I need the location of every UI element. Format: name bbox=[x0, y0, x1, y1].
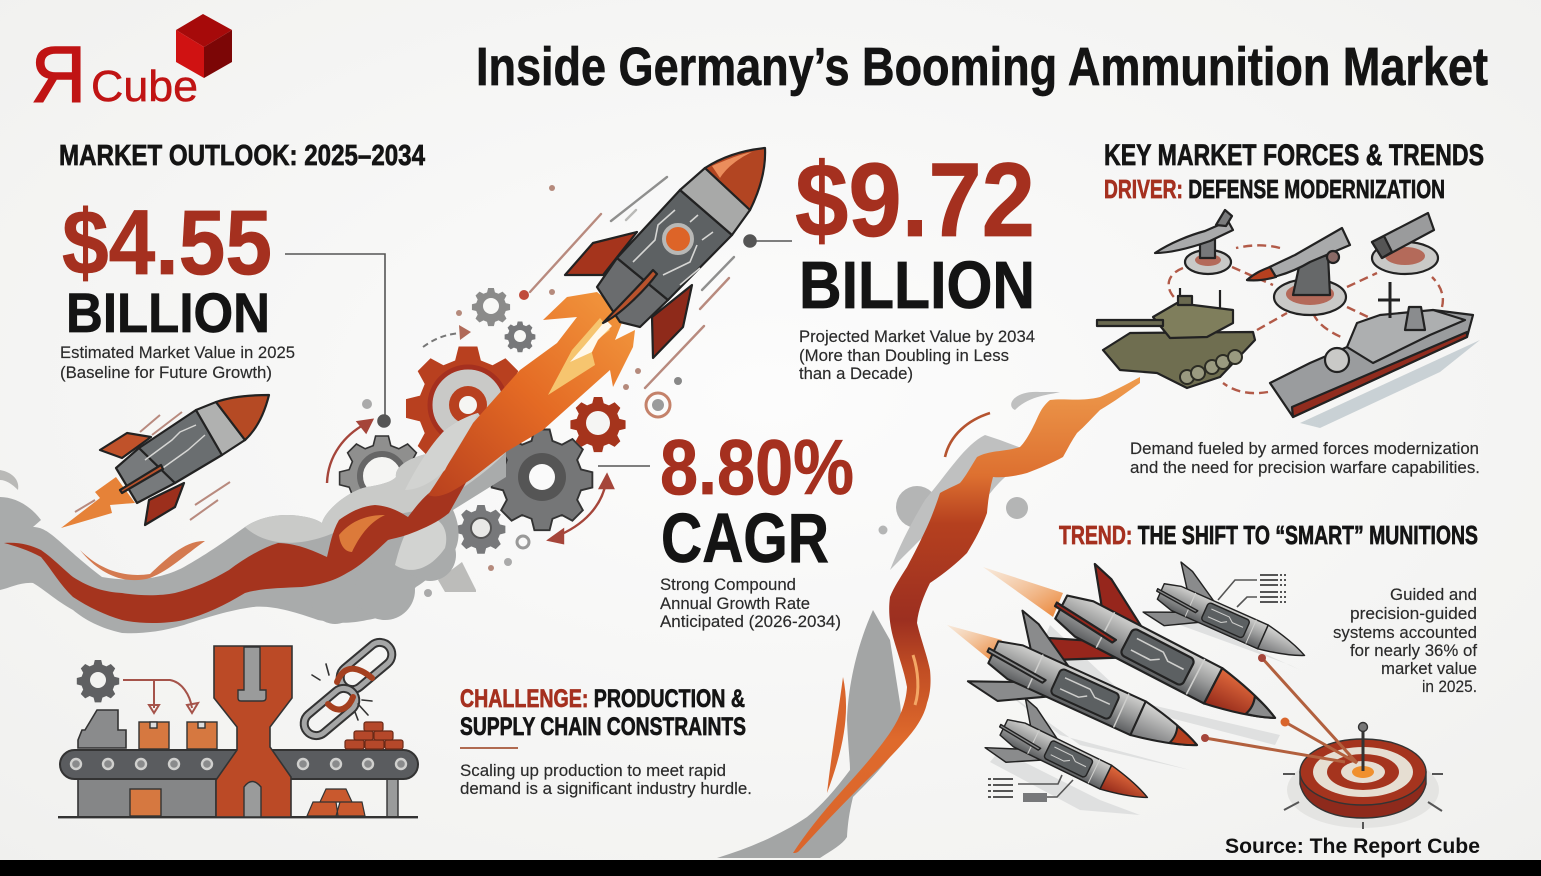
missile shadows bbox=[990, 610, 1300, 815]
rocket hub bbox=[664, 225, 692, 253]
heading: market outlook: MARKET OUTLOOK: 2025–2034 bbox=[59, 140, 425, 172]
challenge text bbox=[460, 685, 752, 798]
rocket nozzle bbox=[597, 258, 668, 327]
ground line bbox=[58, 816, 418, 818]
boxes on belt bbox=[139, 722, 217, 749]
rocket band bbox=[680, 168, 750, 235]
target bbox=[1283, 722, 1443, 829]
large flame trail bbox=[405, 292, 635, 496]
stat: $4.55 billion: $4.55 bbox=[62, 192, 272, 294]
light smoke bbox=[245, 413, 506, 543]
gears cluster bbox=[327, 185, 682, 619]
target lines bbox=[1201, 654, 1357, 763]
arrow around gear right bbox=[549, 475, 613, 543]
base bbox=[78, 778, 216, 817]
missile top right bbox=[1142, 556, 1319, 683]
turret icon bbox=[1247, 228, 1350, 315]
smart munitions illustration bbox=[947, 554, 1443, 829]
stat: 8.80% CAGR: Strong Compound bbox=[660, 575, 796, 594]
missile lower bbox=[966, 602, 1218, 784]
gear orange small bbox=[570, 397, 626, 452]
gear small upper bbox=[505, 322, 535, 352]
factory illustration: conveyor and bottleneck bbox=[58, 638, 418, 818]
driver caption bbox=[1130, 439, 1480, 477]
trend caption bbox=[1333, 585, 1477, 696]
grey smoke blobs bbox=[878, 486, 1028, 534]
callout list icons bbox=[988, 575, 1286, 797]
gear orange large bbox=[406, 346, 530, 471]
rocket body bbox=[617, 190, 732, 300]
right leg bbox=[387, 778, 398, 817]
missile launcher icon bbox=[1155, 210, 1233, 274]
stat: $4.55 billion: (Baseline for Future Growth) bbox=[60, 363, 272, 382]
gear grey bbox=[340, 436, 424, 521]
heading: driver: DRIVER: DEFENSE MODERNIZATION bbox=[1104, 174, 1445, 204]
speed lines around rocket bbox=[519, 177, 734, 388]
orange highlight bbox=[339, 515, 385, 552]
stat: 8.80% CAGR bbox=[660, 423, 854, 631]
challenge text: CHALLENGE: PRODUCTION & bbox=[460, 685, 745, 713]
warship bbox=[1270, 282, 1480, 428]
stat: $9.72 billion bbox=[795, 142, 1035, 383]
bottom black band bbox=[0, 860, 1541, 876]
small rocket speed lines bbox=[75, 412, 230, 520]
tank bbox=[1097, 288, 1255, 388]
logo: RCube bbox=[31, 14, 232, 119]
trend caption: for nearly 36% of bbox=[1350, 641, 1477, 660]
trend caption: in 2025. bbox=[1422, 677, 1477, 696]
stat: $9.72 billion: BILLION bbox=[799, 248, 1035, 323]
grey ring and shard bbox=[438, 536, 529, 592]
arrow around gear left bbox=[327, 420, 372, 483]
flame ribbon connecting right side bbox=[717, 377, 1140, 858]
grey smoke upper bbox=[890, 392, 1060, 570]
big rocket bbox=[565, 148, 765, 358]
source: Source: The Report Cube bbox=[1225, 835, 1480, 858]
challenge text: demand is a significant industry hurdle. bbox=[460, 779, 752, 798]
small dots bbox=[352, 185, 682, 619]
ring target bbox=[646, 393, 670, 417]
trend caption: precision-guided bbox=[1350, 604, 1477, 623]
grey wake bbox=[717, 610, 901, 858]
connector: 9.72 to rocket bbox=[744, 235, 792, 247]
rocket left fin bbox=[565, 232, 637, 275]
highlight bbox=[913, 655, 918, 705]
stat: 8.80% CAGR: CAGR bbox=[661, 499, 829, 577]
grey smoke bbox=[0, 413, 506, 633]
ingots bbox=[307, 789, 365, 816]
challenge text: Scaling up production to meet rapid bbox=[460, 761, 726, 780]
bricks bbox=[345, 722, 403, 749]
connector: 4.55 to gears bbox=[285, 254, 390, 427]
light smoke lower bbox=[395, 517, 446, 570]
stat: 8.80% CAGR: 8.80% bbox=[660, 423, 854, 511]
small rocket bbox=[61, 395, 269, 528]
smoke overlap bbox=[405, 413, 478, 490]
flames bbox=[983, 567, 1063, 617]
small rocket flame bbox=[61, 477, 135, 528]
trend caption: systems accounted bbox=[1333, 623, 1477, 642]
main ribbon bbox=[793, 377, 1140, 853]
trend caption: Guided and bbox=[1390, 585, 1477, 604]
smoke puffs bbox=[311, 529, 456, 624]
rocket circuits bbox=[633, 210, 713, 285]
flame core bbox=[548, 318, 610, 395]
missile centre bbox=[1030, 554, 1300, 759]
machine bbox=[78, 710, 126, 748]
red band bbox=[4, 470, 473, 623]
missile small bbox=[983, 692, 1163, 825]
logo cube bbox=[176, 14, 232, 78]
connector: CAGR to gear bbox=[598, 465, 650, 467]
driver caption: and the need for precision warfare capabilities. bbox=[1130, 458, 1480, 477]
rocket right fin bbox=[652, 285, 692, 358]
dashed arrow top bbox=[423, 325, 471, 347]
conveyor belt bbox=[60, 750, 418, 779]
stat: 8.80% CAGR: Annual Growth Rate bbox=[660, 594, 810, 613]
defense illustration bbox=[1097, 210, 1480, 428]
stat: $4.55 billion: BILLION bbox=[66, 281, 270, 344]
stat: $9.72 billion: $9.72 bbox=[795, 142, 1035, 259]
bottleneck slots bbox=[238, 647, 266, 817]
dashed links bbox=[1169, 245, 1443, 393]
smoke and flame trail, left bbox=[0, 413, 506, 633]
gear dark grey bbox=[492, 430, 592, 530]
launcher box icon bbox=[1372, 213, 1438, 274]
arrows to boxes bbox=[123, 680, 198, 713]
stat: $9.72 billion: than a Decade) bbox=[799, 364, 913, 383]
callout box bbox=[1023, 793, 1047, 802]
stat: 8.80% CAGR: Anticipated (2026-2034) bbox=[660, 612, 841, 631]
gear small bottom bbox=[457, 505, 505, 554]
broken chain bbox=[299, 638, 397, 740]
logo mirrored R: Я bbox=[31, 30, 86, 119]
bottleneck bbox=[214, 646, 292, 817]
stat: $9.72 billion: Projected Market Value by 2034 bbox=[799, 327, 1035, 346]
stat: $9.72 billion: (More than Doubling in Less bbox=[799, 346, 1009, 365]
icon: gear bbox=[77, 660, 119, 702]
side flame streak bbox=[827, 677, 846, 793]
stat: $4.55 billion: Estimated Market Value in 2025 bbox=[60, 343, 295, 362]
logo word Cube: Cube bbox=[91, 62, 198, 111]
rocket centre fin bbox=[603, 270, 657, 323]
challenge text: SUPPLY CHAIN CONSTRAINTS bbox=[460, 713, 746, 741]
arc accent bbox=[945, 413, 990, 457]
rocket nose bbox=[705, 148, 765, 210]
box in base bbox=[130, 789, 161, 816]
gear small top bbox=[472, 288, 510, 326]
driver caption: Demand fueled by armed forces modernization bbox=[1130, 439, 1479, 458]
smoke wisp bbox=[0, 470, 18, 490]
trend caption: market value bbox=[1381, 659, 1477, 678]
stat: $4.55 billion bbox=[60, 192, 295, 382]
upper flick bbox=[80, 541, 205, 580]
